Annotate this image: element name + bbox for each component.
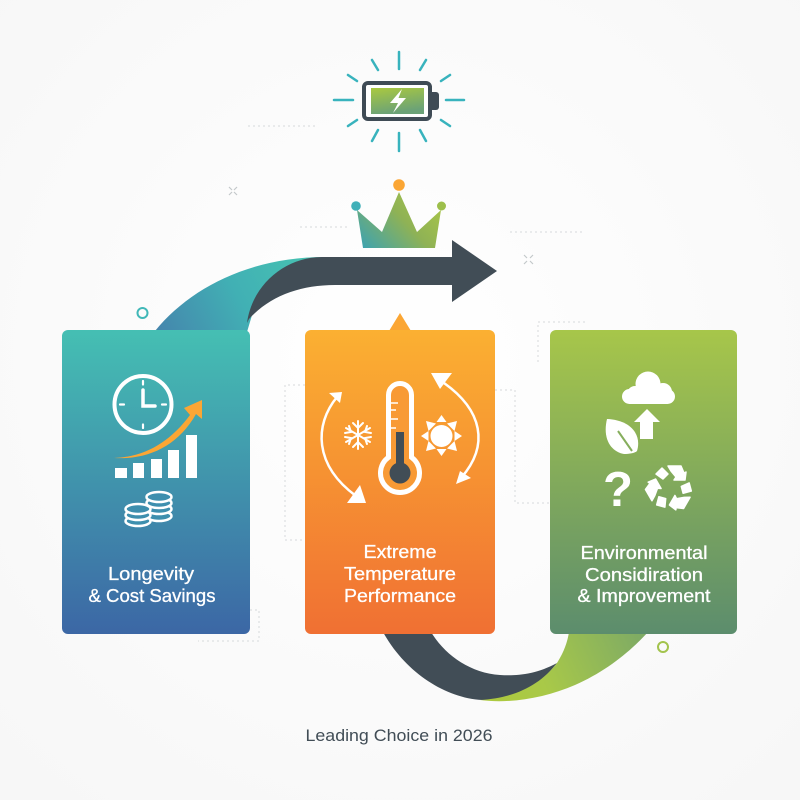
marker: green ring bbox=[658, 642, 668, 652]
icon: snowflake bbox=[345, 421, 371, 449]
label: longevity: Longevity bbox=[108, 564, 194, 584]
icon: sun bbox=[421, 415, 462, 456]
icon: growth arrow bbox=[114, 400, 202, 458]
icon: bar chart bbox=[115, 435, 197, 478]
label: considiration: Considiration bbox=[585, 565, 703, 585]
label: temperature: Temperature bbox=[344, 564, 456, 584]
icon: cycle arrow right bbox=[431, 373, 478, 484]
bottom swoosh arrow bbox=[383, 632, 648, 701]
icon: clock bbox=[114, 376, 172, 433]
icon: cloud bbox=[622, 372, 675, 404]
label: environmental: Environmental bbox=[580, 543, 708, 563]
label: improvement: & Improvement bbox=[578, 586, 710, 606]
panel: longevity and cost savings bbox=[62, 330, 250, 634]
caption: Leading Choice in 2026 bbox=[306, 727, 492, 745]
icon: leaf bbox=[606, 419, 638, 454]
icon: recycle bbox=[643, 466, 696, 513]
panel: environmental consideration and improvement bbox=[550, 330, 737, 634]
panel: extreme temperature performance bbox=[305, 313, 495, 634]
icon: crown bbox=[351, 179, 446, 248]
label: extreme: Extreme bbox=[364, 542, 436, 562]
icon: up arrow bbox=[634, 409, 660, 439]
icon: battery with rays bbox=[334, 52, 464, 151]
icon: coins bbox=[126, 492, 172, 526]
label: performance: Performance bbox=[344, 586, 456, 606]
marker: teal ring bbox=[138, 308, 148, 318]
icon: question mark: ? bbox=[603, 463, 633, 517]
top swoosh arrow bbox=[155, 240, 497, 332]
icon: thermometer bbox=[381, 384, 420, 493]
label: cost savings: & Cost Savings bbox=[88, 586, 216, 606]
icon: cycle arrow left bbox=[322, 392, 366, 503]
